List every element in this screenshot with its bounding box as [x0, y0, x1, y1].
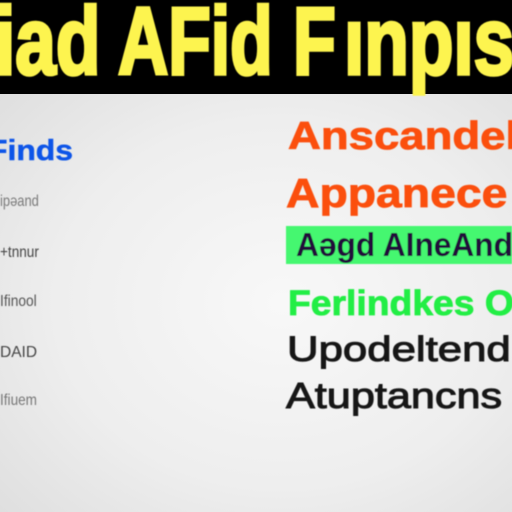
left list items: [0, 193, 39, 409]
left list items: Ifinool: [0, 292, 37, 310]
title text: [0, 0, 512, 95]
left list items: +tnnur: [0, 244, 39, 261]
right column: [286, 114, 512, 416]
left list items: DAID: [0, 344, 37, 361]
green highlighted row: Aǝgd AIneAnd: [296, 226, 512, 263]
green text: Ferlindkes O: [288, 283, 512, 323]
orange heading 1: Anscandel: [288, 114, 512, 157]
orange heading 2: Appanece: [286, 170, 507, 216]
left list items: ipəand: [0, 193, 39, 210]
left list items: Ifiuem: [0, 392, 37, 409]
black text 1: Upodeltend: [287, 330, 511, 369]
black text 2: Atuptancns: [286, 376, 502, 416]
left column: [0, 134, 73, 409]
title banner: [0, 0, 512, 95]
